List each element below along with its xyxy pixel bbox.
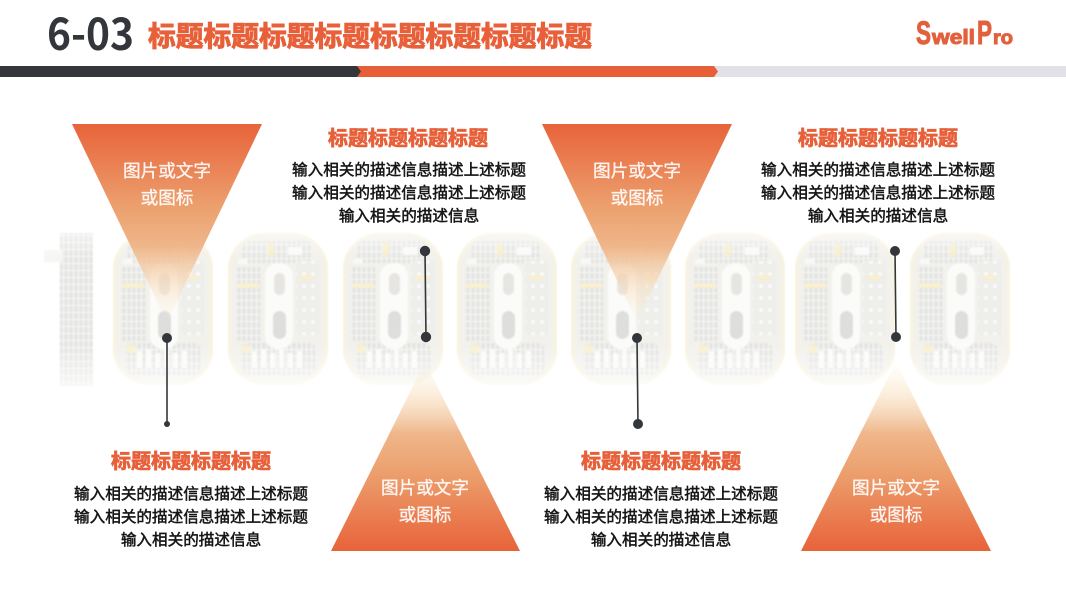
panel 5: title and description, bottom: 标题标题标题标题 xyxy=(111,445,271,474)
panel 7: title and description, bottom: 输入相关的描述信息描述上述标题 xyxy=(544,482,778,504)
panel 7: title and description, bottom xyxy=(544,445,778,550)
panel 2: title and description, top: 输入相关的描述信息描述上述标题 xyxy=(292,181,526,203)
panel 2: title and description, top: 输入相关的描述信息 xyxy=(339,204,479,226)
panel 6: triangle pointing up xyxy=(331,362,520,551)
background: circuit board digits 100000000 xyxy=(40,228,1020,390)
header progress bar xyxy=(0,66,1066,77)
panel 2: title and description, top: 输入相关的描述信息描述上述标题 xyxy=(292,158,526,180)
panel 4: title and description, top: 标题标题标题标题 xyxy=(798,122,958,151)
panel 4: title and description, top: 输入相关的描述信息 xyxy=(808,204,948,226)
panel 2: title and description, top xyxy=(292,122,526,226)
logo: SwellPro: well xyxy=(931,27,975,49)
panel 4: title and description, top: 输入相关的描述信息描述上述标题 xyxy=(761,181,995,203)
panel 5: title and description, bottom: 输入相关的描述信息描述上述标题 xyxy=(74,505,308,527)
header number: 6-03 xyxy=(47,0,134,63)
panel 1: triangle pointing down: 图片或文字 xyxy=(123,158,211,183)
panel 1: triangle pointing down xyxy=(72,124,262,322)
panel 6: triangle pointing up: 或图标 xyxy=(399,502,451,527)
connector 2 xyxy=(420,246,431,342)
panel 8: triangle pointing up xyxy=(801,362,991,551)
panel 7: title and description, bottom: 输入相关的描述信息描述上述标题 xyxy=(544,505,778,527)
panel 3: triangle pointing down: 或图标 xyxy=(611,185,663,210)
logo: SwellPro: ro xyxy=(993,28,1013,49)
panel 7: title and description, bottom: 输入相关的描述信息 xyxy=(591,528,731,550)
connector 4 xyxy=(890,246,901,342)
panel 1: triangle pointing down: 或图标 xyxy=(141,185,193,210)
panel 8: triangle pointing up: 或图标 xyxy=(870,502,922,527)
panel 7: title and description, bottom: 标题标题标题标题 xyxy=(581,445,741,474)
panel 4: title and description, top: 输入相关的描述信息描述上述标题 xyxy=(761,158,995,180)
panel 6: triangle pointing up: 图片或文字 xyxy=(381,475,469,500)
logo: SwellPro: P xyxy=(977,14,992,51)
panel 3: triangle pointing down: 图片或文字 xyxy=(593,158,681,183)
logo: SwellPro xyxy=(916,14,1013,51)
panel 2: title and description, top: 标题标题标题标题 xyxy=(328,122,488,151)
logo: SwellPro: S xyxy=(916,15,931,51)
panel 5: title and description, bottom: 输入相关的描述信息 xyxy=(121,528,261,550)
panel 8: triangle pointing up: 图片或文字 xyxy=(852,475,940,500)
panel 4: title and description, top xyxy=(761,122,995,226)
connector 1 xyxy=(162,333,172,427)
connector 3 xyxy=(632,333,643,429)
panel 5: title and description, bottom xyxy=(74,445,308,550)
panel 5: title and description, bottom: 输入相关的描述信息描述上述标题 xyxy=(74,482,308,504)
panel 3: triangle pointing down xyxy=(542,124,732,322)
header title: 标题标题标题标题标题标题标题标题 xyxy=(148,14,592,54)
